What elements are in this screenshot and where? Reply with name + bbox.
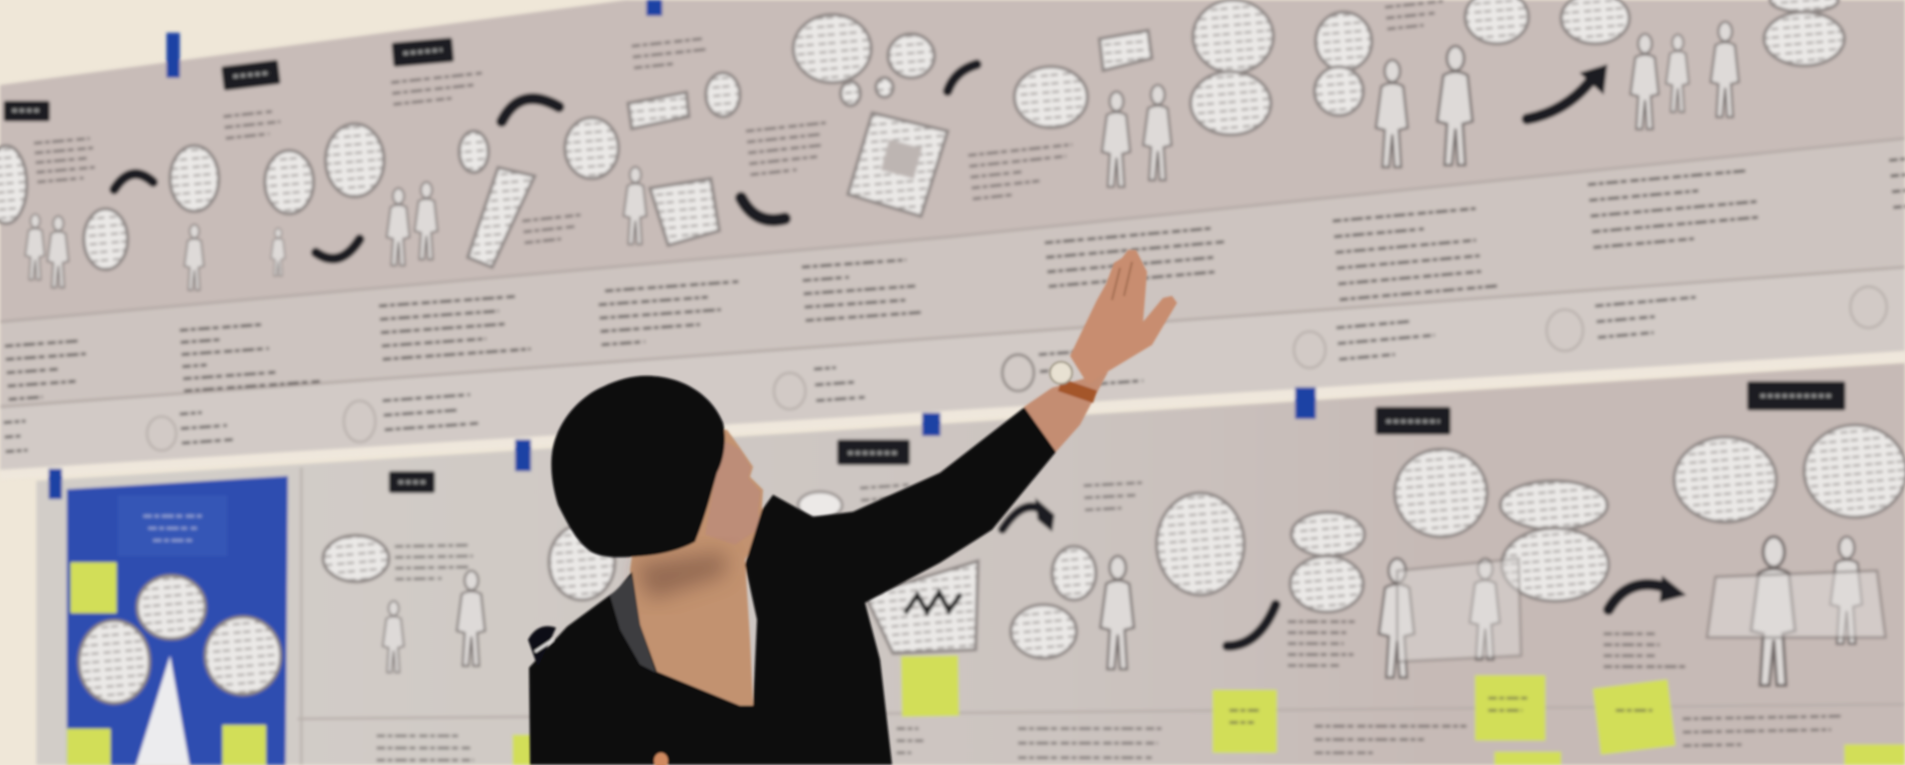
black jacket and arm — [529, 407, 1056, 765]
speech bubbles: lower storyboard — [323, 425, 1905, 658]
bag strap — [528, 626, 556, 668]
other hand — [654, 753, 668, 765]
handwritten notes: second row — [5, 158, 1905, 399]
panel: upper storyboard — [0, 0, 1905, 476]
black hair — [551, 376, 725, 557]
neck shadow — [635, 552, 725, 600]
face, neck and chest — [630, 430, 763, 706]
sticky notes — [67, 562, 1905, 765]
forearm — [1024, 372, 1108, 452]
face colouring — [705, 440, 760, 545]
handwritten notes: third row — [4, 297, 1700, 452]
hand — [1070, 250, 1177, 385]
step circles — [147, 287, 1887, 450]
sketched objects — [468, 113, 978, 653]
handwritten notes: lower board — [377, 483, 1841, 760]
speech bubbles: upper storyboard — [0, 0, 1844, 270]
panel: blue poster — [67, 476, 288, 765]
white ledge — [0, 356, 1905, 475]
presenter — [528, 250, 1177, 765]
jacket lapel — [610, 575, 656, 673]
step labels — [4, 37, 1845, 493]
panel: lower storyboard — [36, 363, 1905, 765]
curved arrows — [114, 64, 1686, 646]
handwritten notes: top row — [34, 1, 1448, 243]
watch — [1050, 362, 1095, 397]
tape strips — [49, 0, 1316, 499]
